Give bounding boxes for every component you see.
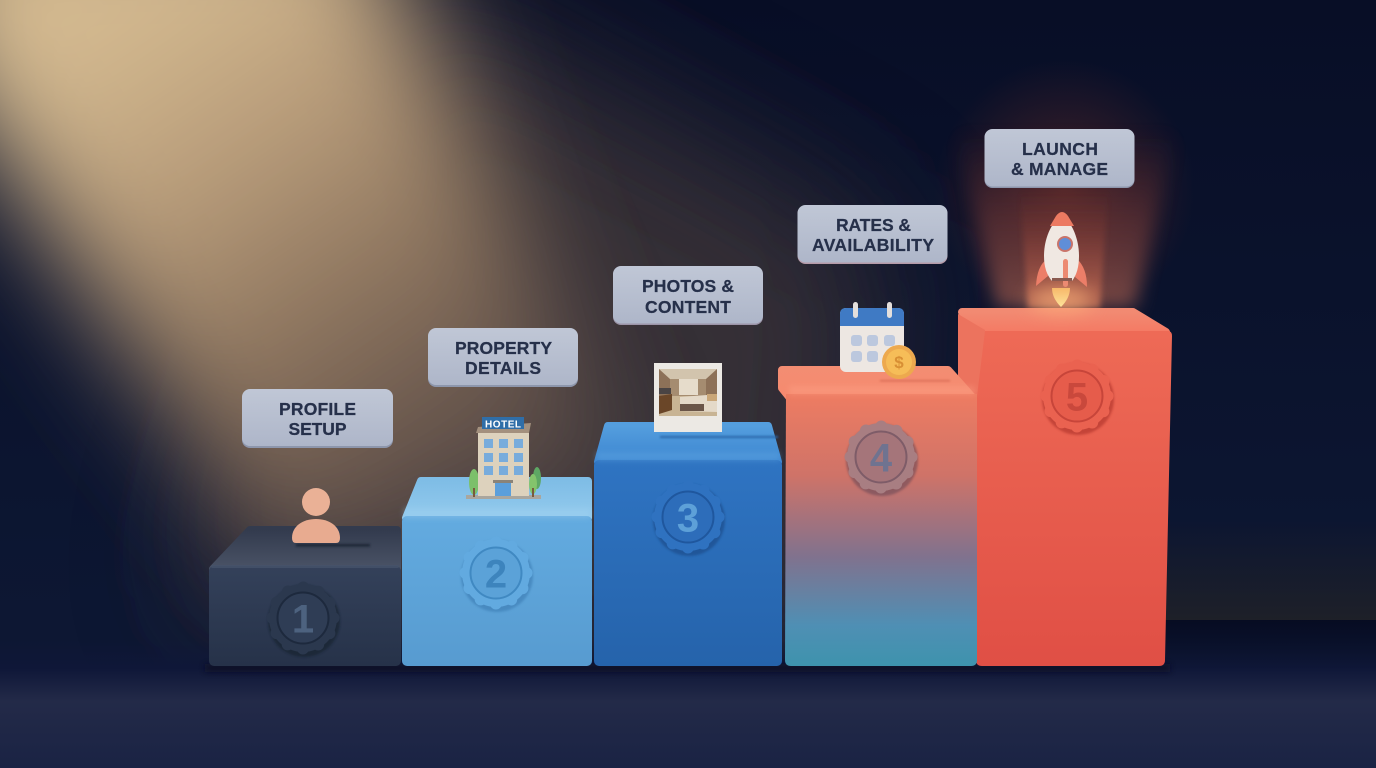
icon: calendar with coin: $ — [894, 353, 904, 372]
step 1 block — [209, 530, 401, 666]
icon: photo — [654, 363, 722, 432]
label: rates and availability: AVAILABILITY — [812, 235, 934, 255]
medallion 4: 4 — [870, 436, 893, 480]
label: photos and content — [613, 266, 763, 325]
icon: calendar with coin — [840, 302, 916, 379]
icon: rocket — [1029, 212, 1093, 313]
label: launch and manage: LAUNCH — [1022, 139, 1098, 159]
medallion 1: 1 — [292, 598, 314, 642]
medallion 5 — [1042, 362, 1114, 435]
label: photos and content: CONTENT — [645, 297, 731, 317]
icon: person — [292, 488, 340, 543]
label: launch and manage: & MANAGE — [1011, 159, 1108, 179]
icon: hotel: HOTEL — [485, 420, 521, 430]
label: profile setup: SETUP — [288, 419, 347, 439]
label: rates and availability — [798, 205, 948, 264]
step 2 block — [402, 481, 592, 666]
label: property details — [428, 328, 578, 387]
medallion 2 — [461, 539, 533, 612]
medallion 5: 5 — [1066, 376, 1088, 420]
icon: hotel — [466, 417, 541, 499]
step 3 block — [594, 426, 782, 666]
rocket glow — [935, 60, 1195, 320]
label: rates and availability: RATES & — [836, 215, 911, 235]
label: property details: PROPERTY — [455, 338, 552, 358]
step 5 block — [958, 312, 1172, 666]
step 4 block — [782, 370, 977, 666]
label: profile setup: PROFILE — [279, 399, 356, 419]
label: photos and content: PHOTOS & — [642, 276, 734, 296]
label: launch and manage — [984, 129, 1134, 188]
label: property details: DETAILS — [465, 358, 541, 378]
label: profile setup — [242, 389, 393, 448]
medallion 2: 2 — [485, 552, 507, 596]
medallion 1 — [268, 584, 340, 657]
medallion 4 — [846, 423, 918, 496]
medallion 3: 3 — [677, 496, 699, 540]
medallion 3 — [653, 483, 725, 556]
